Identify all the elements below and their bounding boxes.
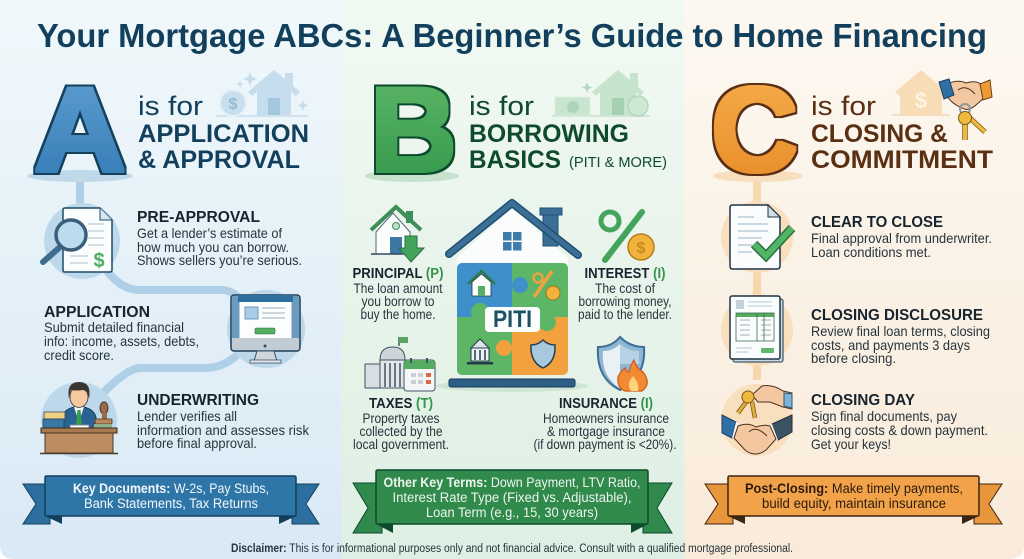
text: interest: The cost of <box>595 281 655 296</box>
icon: capitol and calendar <box>365 337 435 391</box>
ribbon: key documents: Bank Statements, Tax Returns <box>84 496 258 511</box>
ribbon: other key terms: Other Key Terms: Down Payment, LTV Ratio, <box>384 475 640 490</box>
text: clear to close: CLEAR TO CLOSE <box>811 214 943 231</box>
central PITI house <box>436 203 588 392</box>
text: closing disclosure: CLOSING DISCLOSURE <box>811 307 983 324</box>
text: underwriting: UNDERWRITING <box>137 392 259 409</box>
heading B: BORROWING <box>469 120 629 148</box>
text: taxes: local government. <box>353 437 449 452</box>
text: interest <box>578 266 672 322</box>
text: closing disclosure: Review final loan terms, closing <box>811 323 990 339</box>
connector path C <box>753 178 761 380</box>
text: taxes: collected by the <box>360 424 442 439</box>
PITI puzzle <box>449 263 575 387</box>
icon: interest percent and coin: $ <box>637 240 646 257</box>
text: principal: The loan amount <box>354 281 443 296</box>
ribbon: post-closing <box>705 476 1002 524</box>
text: insurance: Homeowners insurance <box>543 411 669 426</box>
icon: keys and handshake <box>721 384 793 456</box>
text: application: Submit detailed financial <box>44 319 184 335</box>
ribbon: other key terms: Loan Term (e.g., 15, 30 years) <box>426 505 598 520</box>
ribbon: key documents: Key Documents: W-2s, Pay Stubs, <box>73 481 269 496</box>
text: insurance <box>534 396 676 452</box>
heading A: APPLICATION <box>138 120 309 148</box>
text: insurance: INSURANCE (I) <box>559 396 653 412</box>
icon: house with handshake and keys <box>892 70 992 140</box>
text: pre-approval: Get a lender’s estimate of <box>137 225 282 241</box>
text: principal: buy the home. <box>360 307 436 322</box>
text: clear to close: Loan conditions met. <box>811 244 931 260</box>
text: principal: you borrow to <box>362 294 434 309</box>
text: application <box>44 304 199 363</box>
ribbon: other key terms <box>353 470 672 533</box>
heading C: CLOSING & <box>811 120 948 148</box>
text: clear to close <box>811 214 992 260</box>
text: closing disclosure <box>811 307 990 366</box>
text: pre-approval: how much you can borrow. <box>137 239 289 255</box>
icon: house with handshake and keys: $ <box>915 88 927 113</box>
text: taxes <box>353 396 449 452</box>
text: taxes: TAXES (T) <box>369 396 433 412</box>
icon: computer monitor <box>227 290 305 368</box>
disclaimer: Disclaimer: This is for informational purposes only and not financial advice. Consult with a qualified mortgage professional. <box>231 543 793 555</box>
text: pre-approval: PRE-APPROVAL <box>137 209 260 226</box>
text: underwriting: information and assesses risk <box>137 422 310 438</box>
text: principal: PRINCIPAL (P) <box>352 266 444 282</box>
letter C: C <box>711 63 798 197</box>
heading C: is for <box>811 91 876 121</box>
text: closing disclosure: costs, and payments 3 days <box>811 337 970 353</box>
text: underwriting: Lender verifies all <box>137 408 237 424</box>
PITI puzzle: PITI <box>493 306 532 333</box>
text: closing day <box>811 392 988 452</box>
icon: document with check <box>721 201 793 273</box>
text: closing day: CLOSING DAY <box>811 392 915 409</box>
text: underwriting: before final approval. <box>137 435 257 451</box>
text: insurance: & mortgage insurance <box>547 424 665 439</box>
text: principal <box>352 266 444 322</box>
icon: document with magnifier: $ <box>93 250 105 272</box>
text: pre-approval <box>137 209 302 268</box>
panel: C closing and commitment <box>705 63 1002 524</box>
letter B: B <box>370 63 457 197</box>
ribbon: other key terms: Interest Rate Type (Fixed vs. Adjustable), <box>392 490 632 505</box>
text: pre-approval: Shows sellers you’re serious. <box>137 252 302 268</box>
text: taxes: Property taxes <box>362 411 440 426</box>
text: application: APPLICATION <box>44 304 150 321</box>
letter A: A <box>34 63 126 197</box>
title: Your Mortgage ABCs: A Beginner’s Guide to Home Financing <box>37 17 987 54</box>
icon: house and coin: $ <box>229 96 238 113</box>
connector path A <box>80 178 244 393</box>
heading A: & APPROVAL <box>138 146 300 174</box>
icon: document with magnifier <box>43 203 120 279</box>
icon: principal house with arrow <box>371 207 424 262</box>
text: closing day: Get your keys! <box>811 436 891 452</box>
panel: A application and approval <box>23 63 319 524</box>
heading A <box>138 91 309 174</box>
text: application: info: income, assets, debts, <box>44 333 199 349</box>
text: interest: borrowing money, <box>578 294 672 309</box>
heading B: is for <box>469 91 534 121</box>
panel: B borrowing basics <box>352 63 676 533</box>
text: closing day: closing costs & down payment. <box>811 422 988 438</box>
icon: interest percent and coin <box>601 212 654 260</box>
icon: underwriter at desk <box>40 382 118 458</box>
text: clear to close: Final approval from underwriter. <box>811 230 992 246</box>
puzzle icons <box>468 271 495 284</box>
icon: money and house <box>552 70 650 116</box>
text: insurance: (if down payment is <20%). <box>534 437 676 452</box>
text: closing day: Sign final documents, pay <box>811 408 957 424</box>
text: underwriting <box>137 392 310 451</box>
text: interest: paid to the lender. <box>578 307 672 322</box>
heading B: (PITI & MORE) <box>569 155 667 171</box>
text: application: credit score. <box>44 347 114 363</box>
heading B: BASICS <box>469 146 561 174</box>
heading B <box>469 91 667 174</box>
icon: shield with flame <box>598 337 647 391</box>
text: interest: INTEREST (I) <box>584 266 666 282</box>
heading C <box>811 91 993 174</box>
icon: closing disclosure <box>721 294 793 366</box>
window <box>503 232 522 250</box>
ribbon: post-closing: build equity, maintain insurance <box>762 496 946 511</box>
ribbon: post-closing: Post-Closing: Make timely payments, <box>745 481 963 496</box>
ribbon: key documents <box>23 476 319 524</box>
icon: house and coin <box>216 70 308 116</box>
heading C: COMMITMENT <box>811 146 993 174</box>
heading A: is for <box>138 91 203 121</box>
text: closing disclosure: before closing. <box>811 350 896 366</box>
